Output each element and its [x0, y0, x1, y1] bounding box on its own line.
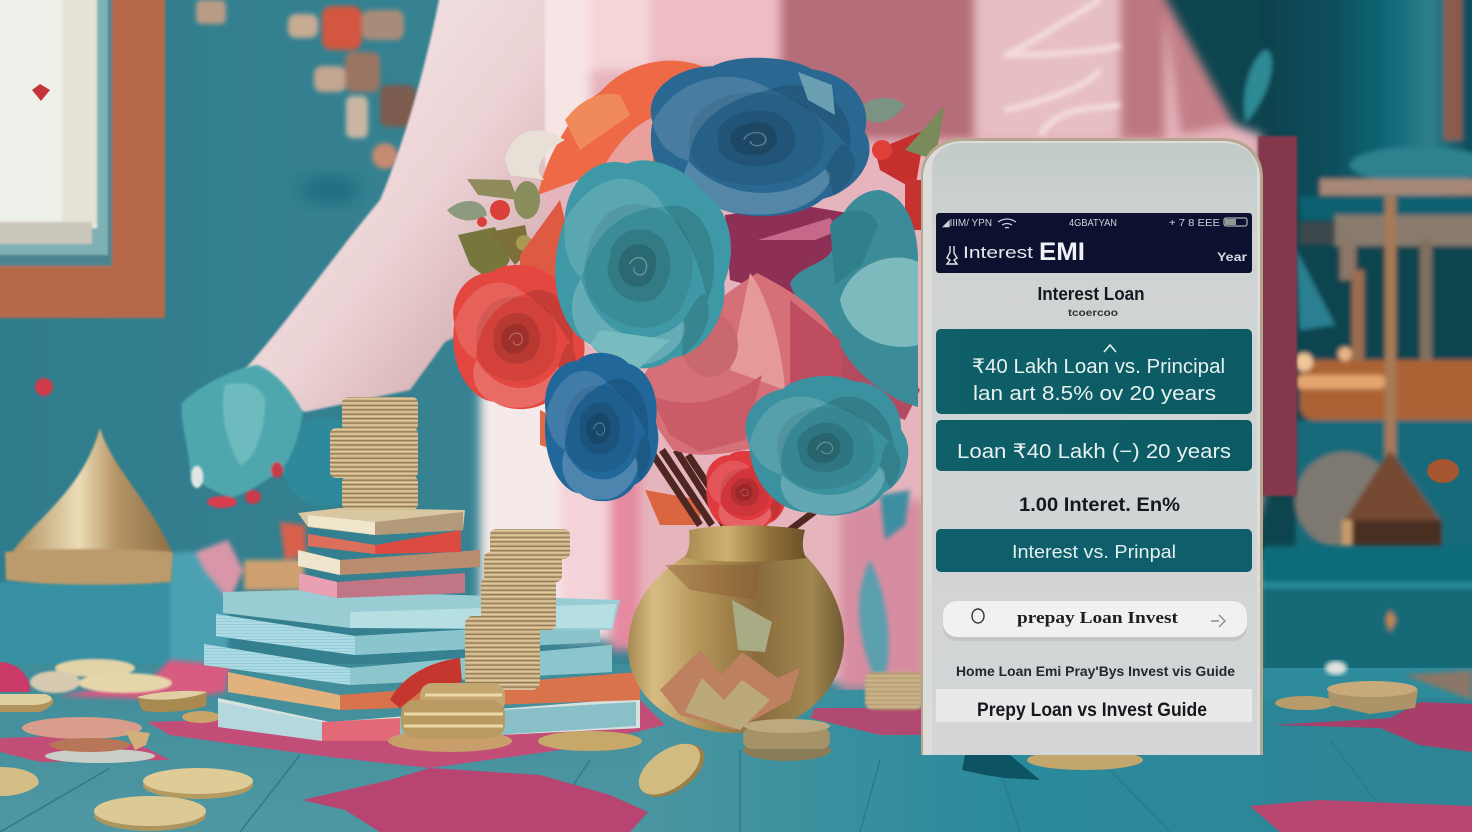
- panel: loan amount: [936, 420, 1252, 471]
- stems: [650, 450, 830, 530]
- book: pink: [299, 573, 465, 598]
- arrow icon: [1211, 615, 1225, 627]
- book: blue top: [223, 590, 620, 630]
- book: blue second: [216, 614, 600, 655]
- book: cream second: [298, 550, 480, 575]
- pink petal: [605, 115, 665, 170]
- panel: guide footer: Prepy Loan vs Invest Guide: [977, 700, 1207, 721]
- title: Interest Loan: [1038, 284, 1144, 304]
- pink paper centre: [810, 708, 925, 735]
- tilted coin: [630, 732, 714, 808]
- panel: interest vs principal: [936, 529, 1252, 572]
- maroon cabinet behind phone: [1258, 136, 1297, 496]
- coin stack on books: [330, 397, 418, 510]
- wifi icon: [998, 219, 1016, 228]
- small red rose: [706, 451, 786, 532]
- pink paper upper left: [58, 660, 230, 700]
- button: prepay loan invest: [943, 601, 1247, 641]
- line one: ₹40 Lakh Loan vs. Principal: [972, 356, 1225, 378]
- caret: [1104, 345, 1116, 352]
- subtitle: tcoercoo: [1068, 308, 1118, 319]
- orange behind stems: [645, 490, 700, 525]
- coin bottom centre: [143, 768, 253, 799]
- maroon back: [800, 300, 920, 420]
- teal smudge on robe: [859, 560, 889, 690]
- pink paper bottom right: [1250, 800, 1472, 832]
- book: lower blue and pink: [218, 698, 640, 741]
- panel: loan summary: [936, 329, 1252, 414]
- status left: ◢IIIM/ YPN: [942, 218, 992, 229]
- leaves left: [447, 179, 575, 290]
- stacked books: [204, 508, 640, 741]
- teal lower rose: [737, 365, 919, 527]
- vase neck: [684, 526, 806, 562]
- pink paper under books: [0, 700, 665, 768]
- phone: [921, 138, 1263, 755]
- left sofa and curtain: [0, 522, 306, 672]
- vase pattern: [660, 650, 800, 730]
- red rose: [453, 265, 585, 409]
- coin small: [182, 711, 220, 723]
- leaves right: [858, 98, 945, 230]
- phone body: [921, 138, 1263, 755]
- coin stack behind phone: [865, 672, 923, 710]
- brown book right edge: [1405, 670, 1472, 700]
- coin stack front: [388, 683, 512, 752]
- coin left edge: [0, 694, 53, 712]
- fold highlights: [1005, 0, 1120, 135]
- button: prepay loan invest: prepay Loan Invest: [1017, 608, 1178, 627]
- teal large rose: [536, 138, 749, 391]
- wooden floor: [0, 664, 1472, 832]
- white petal: [505, 130, 565, 180]
- pink paper foreground: [302, 768, 648, 832]
- book: red: [308, 530, 461, 554]
- battery icon: [1224, 218, 1247, 226]
- panel: loan amount: Loan ₹40 Lakh (−) 20 years: [957, 441, 1231, 463]
- line two: lan art 8.5% ov 20 years: [973, 383, 1216, 405]
- gold vase: [628, 526, 844, 733]
- icon: red petal on wall: [35, 378, 53, 396]
- coin ridged: [137, 691, 207, 712]
- guide line: Home Loan Emi Pray'Bys Invest vis Guide: [956, 663, 1235, 679]
- figure: sleeve: [230, 0, 545, 412]
- window with wooden frame: [0, 0, 165, 318]
- pink paper right: [1272, 702, 1472, 752]
- scattered coins left: [0, 659, 642, 831]
- book: orange: [228, 672, 640, 710]
- header year: Year: [1217, 250, 1247, 264]
- right background shelf scene: [1150, 0, 1472, 560]
- orange petals under red rose: [540, 410, 560, 450]
- pink rose centre: [643, 273, 845, 455]
- coin under phone: [1027, 750, 1143, 770]
- maroon flower: [725, 205, 870, 300]
- teal smudge behind vase: [880, 490, 910, 540]
- header interest: Interest: [963, 243, 1033, 262]
- dark blue rose edge petal: [798, 72, 835, 115]
- blue lower rose: [545, 353, 658, 501]
- header bar: [936, 213, 1252, 273]
- coin bottom left: [0, 767, 39, 796]
- teal rose lower petal: [590, 330, 670, 372]
- status right: + 7 8 EEE: [1169, 218, 1220, 229]
- radio icon: [972, 609, 984, 623]
- figure: pink robe: [230, 0, 1262, 700]
- phone screen: [932, 143, 1257, 755]
- right lower teal furniture: [1262, 546, 1472, 674]
- red ribbon: [390, 658, 462, 708]
- gold cone: [5, 428, 173, 585]
- coin bottom front: [94, 796, 206, 831]
- white scrap: [1325, 661, 1347, 675]
- book: blue third: [204, 644, 612, 685]
- coin stack by vase: [743, 719, 831, 761]
- phone bevel: [923, 141, 1260, 755]
- coin group right: [1275, 681, 1418, 714]
- dark blue rose: [651, 58, 870, 216]
- flower bouquet: [447, 58, 945, 532]
- icon: ornament on right wall: [1427, 459, 1459, 483]
- status centre: 4GBATYAN: [1069, 218, 1117, 229]
- blurred wall ornaments: [196, 0, 416, 169]
- interest line: 1.00 Interet. En%: [1019, 495, 1180, 516]
- panel: interest vs principal: Interest vs. Prinpal: [1012, 542, 1176, 562]
- coin flat right of books: [538, 731, 642, 751]
- dark tassel under phone: [962, 755, 1040, 780]
- coin pink stack: [22, 717, 155, 763]
- pink petal left: [0, 662, 30, 692]
- book: cream top: [298, 508, 465, 535]
- coin stack tall: [465, 529, 570, 690]
- header person icon: [947, 246, 957, 264]
- coin pile back: [30, 659, 172, 693]
- gloved hand: [182, 365, 370, 508]
- panel: guide footer: [936, 689, 1252, 722]
- pink leaf: [758, 218, 840, 240]
- icon: red petal on window: [32, 84, 50, 101]
- teal right flower: [790, 190, 918, 407]
- header EMI: EMI: [1039, 238, 1085, 266]
- orange flower: [538, 61, 715, 195]
